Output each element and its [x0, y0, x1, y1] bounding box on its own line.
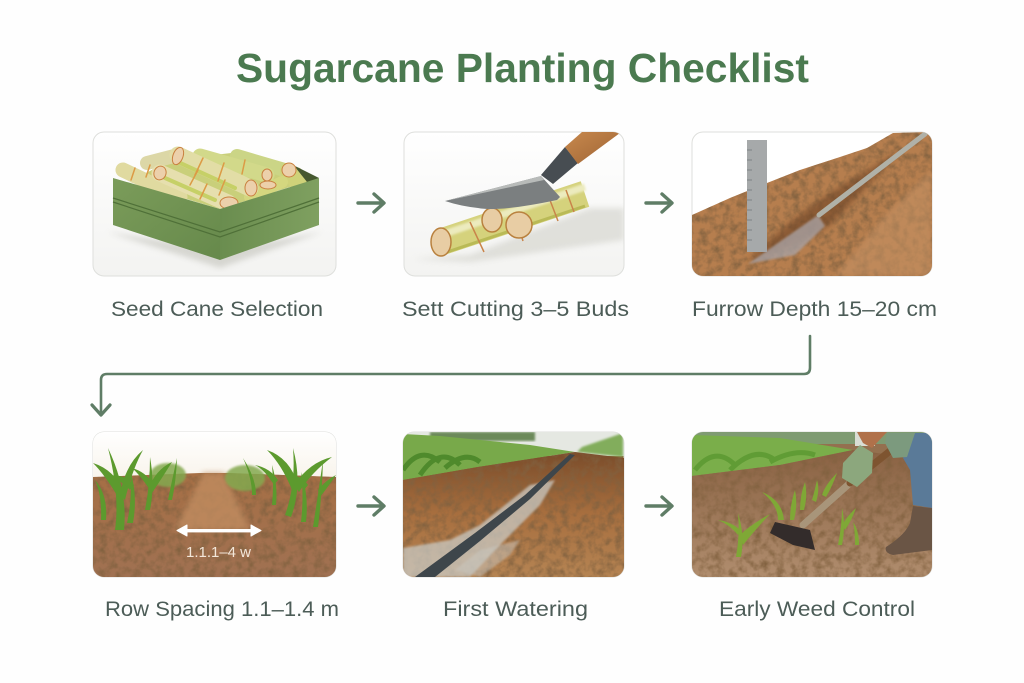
- icon: hoe handle: [803, 483, 850, 525]
- crop field left: [403, 434, 575, 480]
- sky glow: [93, 432, 336, 482]
- icon: seedlings: [718, 473, 859, 557]
- background field: [692, 432, 932, 444]
- icon: drip pipe: [415, 454, 575, 577]
- icon: crate left face: [113, 178, 220, 260]
- arrow: step 4 to 5: [358, 497, 384, 515]
- panel: first watering: [403, 432, 624, 577]
- water: [403, 480, 555, 577]
- soil: [692, 450, 932, 577]
- icon: hoe blade: [770, 522, 815, 550]
- panel: seed cane selection: [93, 132, 336, 276]
- icon: glove: [842, 445, 873, 487]
- icon: knife blade: [445, 176, 560, 209]
- panel: row spacing: [93, 432, 336, 577]
- icon: cane stalk: [441, 187, 585, 254]
- icon: double arrow: [177, 525, 261, 536]
- label: first watering: First Watering: [443, 598, 588, 621]
- spacing label: 1.1.1–4 w: [186, 544, 251, 561]
- label: row spacing: Row Spacing 1.1–1.4 m: [105, 598, 339, 621]
- icon: cut cane ends: [152, 146, 296, 209]
- distant trees: [430, 432, 535, 441]
- icon: sleeve: [885, 433, 915, 458]
- icon: gravel spray: [748, 215, 825, 264]
- panel: early weed control: [692, 432, 932, 577]
- label: early weed control: Early Weed Control: [719, 598, 915, 621]
- icon: knife ferrule: [541, 147, 578, 184]
- label: furrow depth: Furrow Depth 15–20 cm: [692, 298, 937, 321]
- panel: furrow depth: [692, 132, 932, 276]
- sky: [403, 432, 624, 456]
- crop field right: [577, 433, 623, 457]
- icon: crate interior: [130, 152, 312, 209]
- icon: crate right face: [220, 178, 319, 260]
- icon: forearm: [857, 432, 887, 448]
- icon: crate shadow: [108, 232, 322, 268]
- soil ridge highlight: [835, 170, 932, 276]
- furrow shadow: [748, 150, 900, 262]
- connector arrow: row 1 to row 2: [92, 336, 810, 415]
- icon: knife handle: [565, 132, 619, 164]
- soil: [403, 452, 624, 577]
- arrow: step 2 to 3: [646, 194, 672, 212]
- icon: rod: [819, 134, 925, 215]
- label: sett cutting: Sett Cutting 3–5 Buds: [402, 298, 629, 321]
- icon: sugarcane pile: [123, 155, 300, 203]
- soil mound: [692, 132, 932, 276]
- title: Sugarcane Planting Checklist: [236, 45, 809, 91]
- arrow: step 1 to 2: [358, 194, 384, 212]
- distant plants: [150, 463, 265, 491]
- icon: corn plants right: [243, 448, 336, 527]
- crop rows: [692, 435, 853, 476]
- arrow: step 5 to 6: [646, 497, 672, 515]
- icon: boot: [886, 506, 932, 555]
- icon: ruler: [747, 140, 767, 252]
- icon: corn plants left: [93, 448, 177, 530]
- soil: [93, 473, 336, 577]
- icon: cane shadow: [413, 208, 624, 262]
- centre path: [175, 473, 250, 530]
- icon: jeans: [903, 433, 932, 508]
- label: seed cane selection: Seed Cane Selection: [111, 298, 323, 321]
- icon: cut ends: [431, 208, 532, 256]
- panel: sett cutting: [404, 130, 624, 276]
